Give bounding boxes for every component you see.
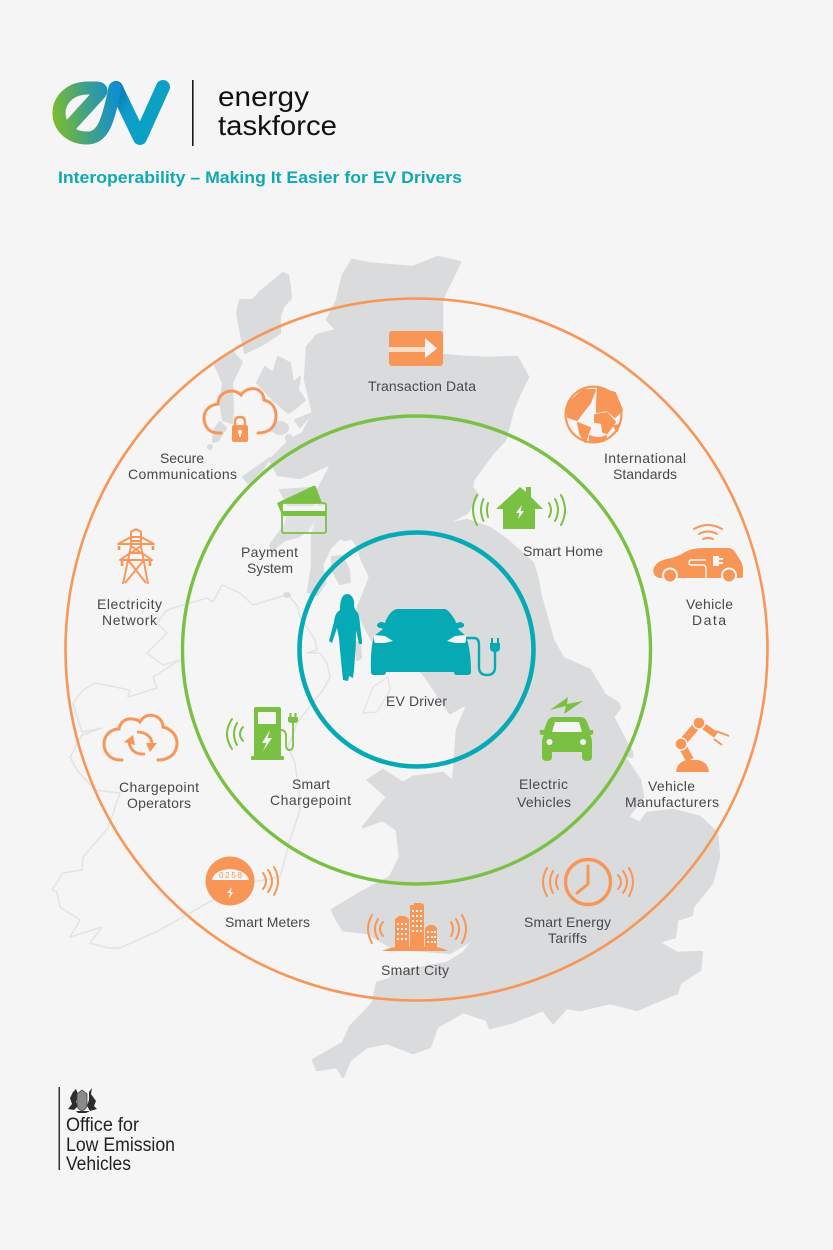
- label: Smart Chargepoint: [270, 776, 351, 808]
- label: Smart City: Smart City: [381, 962, 449, 978]
- icon: connected vehicle: [653, 525, 743, 584]
- label: Smart Energy Tariffs: Smart Energy: [524, 914, 611, 930]
- label: Chargepoint Operators: Operators: [127, 795, 191, 811]
- car body: [371, 609, 471, 675]
- label: Vehicle Data: Data: [692, 612, 726, 628]
- label: Smart Chargepoint: Smart: [292, 776, 330, 792]
- label: Vehicle Manufacturers: [625, 778, 719, 810]
- label: Vehicle Data: [686, 596, 733, 628]
- label: Electricity Network: Network: [102, 612, 158, 628]
- label: Payment System: [241, 544, 298, 576]
- icon: woman silhouette: [329, 594, 362, 681]
- logo mark: eV: [59, 87, 163, 138]
- map: lough: [283, 592, 291, 598]
- label: Payment System: Payment: [241, 544, 298, 560]
- label: International Standards: International: [604, 450, 686, 466]
- map: Great Britain mainland: [270, 257, 719, 1077]
- logo wordmark: energy: [218, 81, 309, 112]
- crest shield: [77, 1090, 87, 1111]
- icon: chargepoint operators cloud: [104, 715, 177, 760]
- label: Vehicle Manufacturers: Manufacturers: [625, 794, 719, 810]
- OLEV wordmark: Vehicles: [66, 1154, 131, 1175]
- royal crest: [68, 1088, 97, 1113]
- label: Secure Communications: Communications: [128, 466, 237, 482]
- OLEV wordmark: Office for: [66, 1115, 140, 1136]
- icon: smart city: [368, 902, 466, 951]
- icon: EV car with plug: [371, 609, 500, 675]
- icon: electric vehicle: [540, 697, 593, 761]
- ring: middle green: [182, 416, 650, 884]
- label: Smart Energy Tariffs: Tariffs: [548, 930, 587, 946]
- logo divider: [192, 80, 194, 146]
- headlights: [374, 635, 466, 643]
- map: Scottish islands: [208, 273, 361, 660]
- label: EV Driver: EV Driver: [386, 693, 447, 709]
- icon: secure cloud with lock: [204, 389, 276, 442]
- logo wordmark: taskforce: [218, 110, 337, 141]
- label: Transaction Data: Transaction Data: [368, 378, 476, 394]
- icon: credit card: [277, 486, 326, 533]
- label: International Standards: [604, 450, 686, 482]
- charging cable: [466, 638, 495, 675]
- label: Electricity Network: Electricity: [97, 596, 162, 612]
- title: Interoperability – Making It Easier for EV Drivers: [58, 168, 462, 187]
- logo wordmark: [218, 81, 337, 141]
- icon: electricity pylon: [118, 529, 154, 584]
- icon: transaction card with arrow: [389, 331, 443, 366]
- map: Ireland outline: [52, 585, 330, 948]
- label: Smart Home: Smart Home: [523, 543, 603, 559]
- label: Smart Meters: Smart Meters: [225, 914, 310, 930]
- label: Smart Energy Tariffs: [524, 914, 611, 946]
- label: Vehicle Manufacturers: Vehicle: [648, 778, 695, 794]
- icon: smart energy tariffs clock: [543, 860, 633, 904]
- icon: smart chargepoint: [227, 707, 298, 760]
- label: Smart Chargepoint: Chargepoint: [270, 792, 351, 808]
- ring: outer orange: [66, 298, 768, 1000]
- label: Chargepoint Operators: Chargepoint: [119, 779, 199, 795]
- icon: smart meter: [206, 856, 278, 906]
- OLEV rule: [58, 1087, 60, 1170]
- label: Electric Vehicles: [517, 776, 571, 810]
- icon: smart home: [473, 487, 565, 529]
- label: Electric Vehicles: Electric: [519, 776, 568, 792]
- label: Vehicle Data: Vehicle: [686, 596, 733, 612]
- logo: EV energy taskforce: [59, 80, 337, 146]
- icon: smart meter: 0258: [219, 871, 243, 880]
- label: Electricity Network: [97, 596, 162, 628]
- ring: inner teal: [300, 532, 534, 766]
- label: Chargepoint Operators: [119, 779, 199, 811]
- label: Secure Communications: Secure: [160, 450, 204, 466]
- map: Isle of Man: [363, 677, 390, 713]
- OLEV wordmark: Low Emission: [66, 1135, 175, 1156]
- OLEV wordmark: [66, 1115, 175, 1175]
- label: Payment System: System: [247, 560, 293, 576]
- map: United Kingdom and Ireland: [52, 257, 719, 1077]
- label: Electric Vehicles: Vehicles: [517, 794, 571, 810]
- label: International Standards: Standards: [613, 466, 677, 482]
- logo: Office for Low Emission Vehicles: [58, 1087, 175, 1175]
- icon: globe: [564, 386, 622, 444]
- label: Secure Communications: [128, 450, 237, 482]
- icon: robot arm: [675, 717, 729, 772]
- plug: [490, 638, 500, 652]
